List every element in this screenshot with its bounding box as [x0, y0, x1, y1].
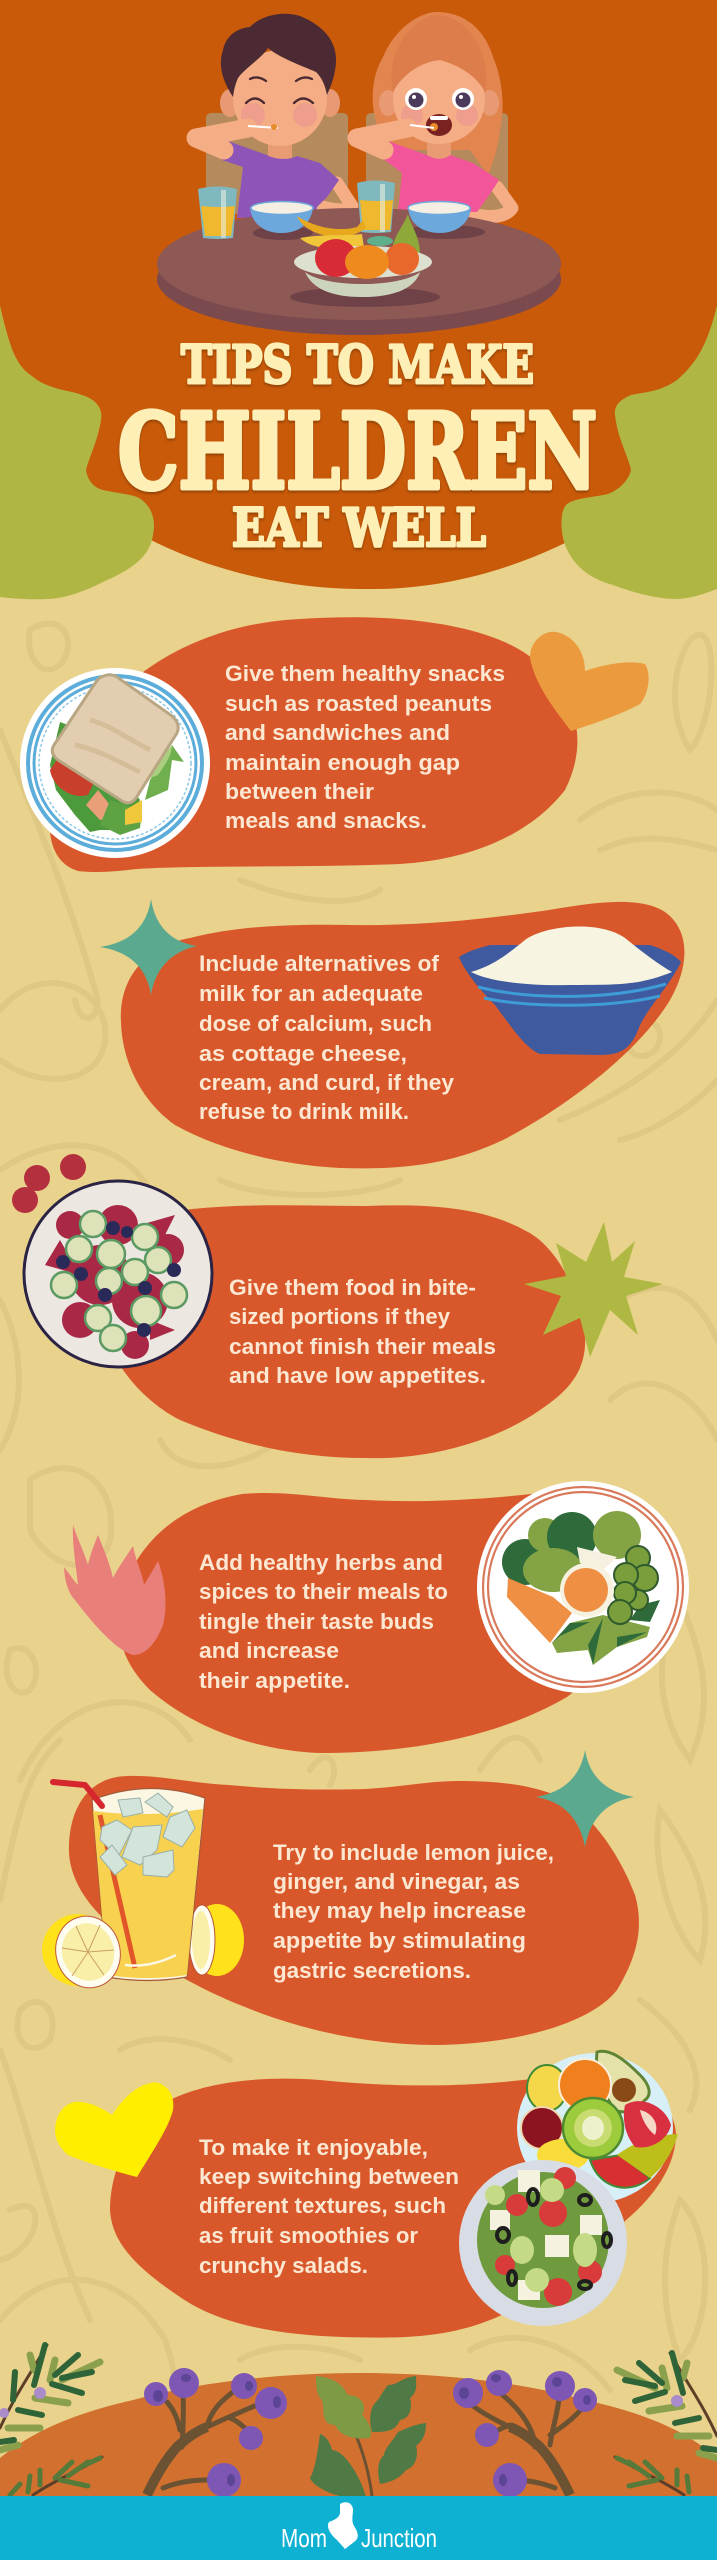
icon: salad plate — [24, 1181, 212, 1367]
icon: teal star — [536, 1750, 634, 1847]
icon: yellow heart — [55, 2082, 173, 2177]
text: tip 5: Try to include lemon juice, — [273, 1840, 554, 1865]
bananas — [297, 216, 366, 237]
text: tip 4 — [199, 1550, 448, 1693]
icon: bowl of curd — [459, 926, 681, 1055]
text: tip 4: and increase — [199, 1638, 339, 1663]
text: tip 3: sized portions if they — [229, 1304, 450, 1329]
fruit bowl — [294, 246, 432, 278]
rosemary right — [615, 2353, 717, 2495]
text: tip 5: appetite by stimulating — [273, 1928, 526, 1953]
text: tip 4: tingle their taste buds — [199, 1609, 434, 1634]
fruits — [385, 243, 419, 275]
text: tip 3: and have low appetites. — [229, 1363, 486, 1388]
left green blob — [0, 306, 154, 599]
text: tip 3: cannot finish their meals — [229, 1334, 496, 1359]
text: tip 5: ginger, and vinegar, as — [273, 1869, 520, 1894]
icon: sandwich plate — [20, 668, 210, 858]
panel: tip 2 milk alternatives — [100, 899, 684, 1168]
title: EAT WELL — [232, 498, 486, 559]
text: tip 1 — [225, 661, 505, 833]
text: tip 1: maintain enough gap — [225, 750, 460, 775]
girl — [357, 15, 512, 216]
oak leaf sprig — [310, 2376, 426, 2497]
text: tip 5: gastric secretions. — [273, 1958, 471, 1983]
icon: olive starburst — [524, 1222, 663, 1357]
right green blob — [561, 306, 717, 599]
logo mark — [328, 2502, 358, 2549]
text: tip 1: between their — [225, 779, 374, 804]
glass right — [357, 180, 395, 233]
title: TIPS TO MAKE — [181, 335, 534, 396]
icon: pink flame leaf — [64, 1525, 165, 1655]
illustration: children at table — [157, 12, 561, 335]
icon: orange heart — [530, 632, 649, 731]
text: tip 2 — [199, 951, 454, 1124]
text: tip 2: Include alternatives of — [199, 951, 440, 976]
table shadows — [253, 226, 313, 240]
header orange background — [0, 0, 717, 589]
text: tip 3: Give them food in bite- — [229, 1275, 476, 1300]
table — [157, 223, 561, 335]
text: tip 5: they may help increase — [273, 1898, 526, 1923]
glass left — [198, 186, 237, 239]
text: tip 2: dose of calcium, such — [199, 1011, 432, 1036]
pear — [392, 214, 420, 265]
text: tip 4: Add healthy herbs and — [199, 1550, 443, 1575]
text: tip 1: such as roasted peanuts — [225, 691, 492, 716]
text: tip 1: meals and snacks. — [225, 808, 427, 833]
bowl right — [408, 207, 471, 233]
logo: MomJunction — [281, 2502, 437, 2553]
bowl left — [250, 207, 313, 233]
panel: tip 3 bite-sized portions — [12, 1154, 663, 1458]
text: tip 5 — [273, 1840, 554, 1983]
footer bar — [0, 2496, 717, 2560]
text: tip 4: their appetite. — [199, 1668, 350, 1693]
boy — [196, 14, 352, 218]
icon: teal star — [100, 899, 197, 995]
logo: MomJunction: Mom — [281, 2523, 327, 2553]
berry branch right — [453, 2370, 597, 2497]
text: tip 6: different textures, such — [199, 2193, 446, 2218]
girl chair — [366, 113, 508, 214]
berry branch left — [144, 2368, 287, 2497]
bottom orange hill — [0, 2373, 717, 2500]
panel: tip 6 switching textures — [55, 2051, 678, 2338]
icon: lemon drink glass — [42, 1782, 244, 1995]
title — [118, 335, 597, 559]
text: tip 2: milk for an adequate — [199, 981, 423, 1006]
text: tip 4: spices to their meals to — [199, 1579, 448, 1604]
rosemary left — [0, 2345, 102, 2495]
text: tip 2: cream, and curd, if they — [199, 1070, 454, 1095]
girl back hair — [373, 12, 503, 175]
logo: MomJunction: Junction — [361, 2523, 437, 2553]
icon: berries — [12, 1154, 86, 1213]
icon: salad plate — [459, 2160, 627, 2326]
panel: tip 1 healthy snacks — [20, 617, 649, 872]
text: tip 6: keep switching between — [199, 2164, 459, 2189]
text: tip 6 — [199, 2135, 459, 2278]
text: tip 6: crunchy salads. — [199, 2253, 368, 2278]
text: tip 3 — [229, 1275, 496, 1388]
boy chair — [206, 113, 348, 214]
background doodle pattern — [0, 623, 717, 2420]
text: tip 1: Give them healthy snacks — [225, 661, 505, 686]
text: tip 6: as fruit smoothies or — [199, 2223, 418, 2248]
icon: vegetable plate — [477, 1481, 689, 1693]
text: tip 1: and sandwiches and — [225, 720, 450, 745]
text: tip 2: refuse to drink milk. — [199, 1099, 409, 1124]
text: tip 6: To make it enjoyable, — [199, 2135, 428, 2160]
panel: tip 4 herbs and spices — [64, 1481, 689, 1753]
text: tip 2: as cottage cheese, — [199, 1041, 407, 1066]
icon: fruit plate — [517, 2051, 678, 2203]
panel: tip 5 lemon, ginger, vinegar — [42, 1750, 639, 2045]
